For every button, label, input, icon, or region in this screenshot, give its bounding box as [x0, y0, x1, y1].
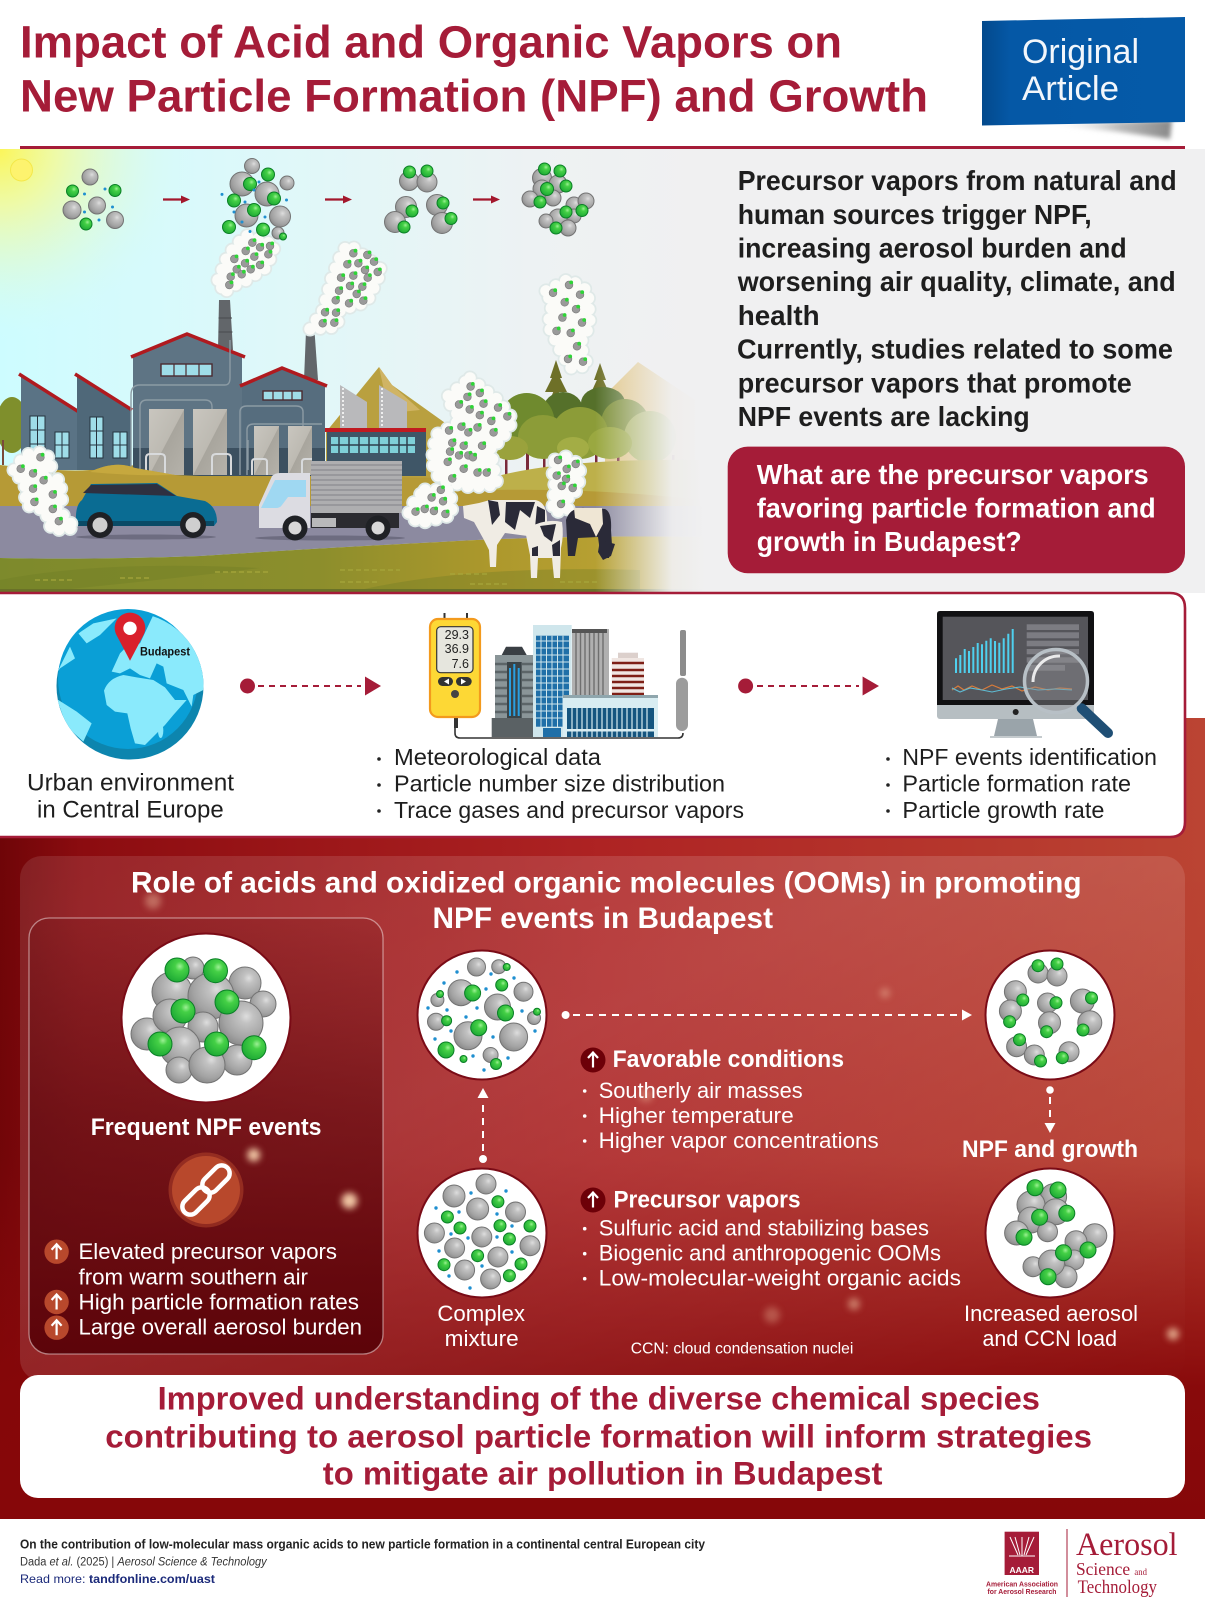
grass	[0, 537, 705, 590]
label: complex mixture	[437, 1301, 526, 1351]
callout: research question: What are the precursor vapors	[757, 459, 1149, 490]
header background	[0, 0, 1205, 149]
text block: favorable conditions: Favorable conditions	[613, 1046, 844, 1073]
text: background statement: health	[738, 300, 820, 331]
cluster: grown particles	[522, 163, 594, 236]
label: NPF and growth: NPF and growth	[962, 1136, 1138, 1163]
icon: chain link	[168, 1152, 244, 1228]
logo: Aerosol Science and Technology	[1076, 1527, 1178, 1598]
label: increased aerosol and CCN load: Increased aerosol	[964, 1301, 1138, 1326]
arrow: clustering to pairs	[562, 1010, 972, 1020]
list: data collected: Trace gases and precursor vapors	[394, 797, 744, 823]
list: data collected: Meteorological data	[394, 744, 601, 770]
title	[20, 16, 928, 122]
truck	[255, 461, 405, 540]
arrow: mixture up to clustering	[478, 1088, 488, 1163]
text: urban environment	[27, 770, 234, 824]
illustration: industrial scene with vapors	[0, 149, 705, 592]
list: elevated outcomes	[44, 1239, 362, 1340]
label: increased aerosol and CCN load	[964, 1301, 1138, 1351]
text block: favorable conditions	[580, 1046, 879, 1153]
arrows: growth sequence	[163, 196, 500, 204]
text block: favorable conditions: Higher temperature	[599, 1103, 794, 1128]
label: complex mixture: mixture	[445, 1326, 519, 1351]
text: background statement: human sources trigger NPF,	[738, 199, 1092, 230]
text: citation: Read more: tandfonline.com/uast	[20, 1572, 215, 1586]
callout: conclusion	[20, 1375, 1185, 1498]
text block: precursor vapors: Precursor vapors	[614, 1187, 800, 1214]
list: data collected	[377, 744, 744, 823]
text block: precursor vapors: Biogenic and anthropogenic OOMs	[599, 1241, 941, 1266]
heading: Role of acids and oxidized organic molecules (OOMs) in promoting	[131, 867, 1082, 900]
list: data collected: Particle number size distribution	[394, 771, 725, 797]
text block: precursor vapors	[580, 1187, 961, 1291]
logo: AAAR	[986, 1532, 1058, 1596]
text: background statement: increasing aerosol burden and	[738, 233, 1127, 264]
title: New Particle Formation (NPF) and Growth	[20, 70, 928, 122]
heading	[131, 867, 1082, 935]
fade to panel	[595, 340, 705, 592]
text: background statement: Precursor vapors from natural and	[738, 165, 1177, 196]
smoke plumes	[14, 235, 590, 530]
icon: clustering mixture circle	[418, 950, 546, 1080]
text: background statement	[737, 165, 1177, 432]
text: background statement: worsening air quality, climate, and	[737, 266, 1176, 297]
label: increased aerosol and CCN load: and CCN load	[982, 1326, 1117, 1351]
icon: grown particles circle	[986, 1168, 1114, 1298]
text: background statement: NPF events are lacking	[738, 401, 1030, 432]
text block: precursor vapors: Sulfuric acid and stabilizing bases	[599, 1216, 929, 1241]
note: CCN definition: CCN: cloud condensation nuclei	[631, 1340, 853, 1357]
label: frequent NPF events: Frequent NPF events	[91, 1114, 322, 1141]
list: analyses: Particle formation rate	[902, 771, 1131, 797]
icon: measuring instruments and city: 29.3	[445, 628, 469, 642]
footer background	[0, 1519, 1205, 1607]
icon: globe with Budapest pin	[56, 609, 205, 760]
red background	[0, 718, 1205, 1519]
cluster: paired molecules	[384, 165, 457, 234]
text: citation	[20, 1537, 705, 1586]
arrow: pairs to growth	[1044, 1086, 1056, 1133]
logo: Aerosol Science and Technology: Technology	[1078, 1577, 1157, 1598]
text block: favorable conditions: Higher vapor concentrations	[599, 1128, 879, 1153]
factory buildings	[19, 334, 426, 476]
icon: monitor with magnifier	[937, 611, 1108, 738]
icon: measuring instruments and city: 7.6	[452, 657, 469, 671]
text block: precursor vapors: Low-molecular-weight organic acids	[599, 1266, 961, 1291]
title: Impact of Acid and Organic Vapors on	[20, 16, 842, 68]
icon: large particle	[122, 934, 290, 1102]
callout: research question: growth in Budapest?	[757, 526, 1022, 557]
callout: conclusion: contributing to aerosol particle formation will inform strategies	[105, 1418, 1092, 1454]
logo: AAAR: for Aerosol Research	[988, 1587, 1057, 1596]
icon: measuring instruments and city: 36.9	[445, 642, 469, 656]
logo: Aerosol Science and Technology: Science and	[1076, 1559, 1147, 1579]
logo: AAAR: AAAR	[1010, 1565, 1034, 1575]
list: analyses: Particle growth rate	[902, 797, 1104, 823]
callout: conclusion: Improved understanding of the diverse chemical species	[158, 1380, 1040, 1416]
callout: research question	[728, 447, 1185, 573]
list: analyses	[886, 744, 1157, 823]
icon: measuring instruments and city	[430, 613, 688, 738]
arrow: globe to instruments	[240, 676, 381, 696]
text: citation: Dada et al. (2025) | Aerosol Science & Technology	[20, 1557, 268, 1569]
list: elevated outcomes: Elevated precursor vapors	[78, 1239, 337, 1264]
car	[76, 483, 217, 540]
badge: original article: Article	[1022, 70, 1119, 108]
logo: AAAR: American Association	[986, 1580, 1058, 1589]
hill	[0, 462, 700, 512]
badge: original article	[982, 17, 1185, 139]
list: analyses: NPF events identification	[902, 744, 1157, 770]
text: urban environment: in Central Europe	[37, 797, 224, 824]
arrow: instruments to analysis	[738, 676, 879, 696]
badge: original article: Original	[1022, 33, 1139, 71]
road	[0, 506, 705, 559]
dirt mound	[0, 465, 300, 512]
cluster: separate vapors	[63, 169, 124, 230]
molecule clusters: growth sequence	[63, 158, 594, 240]
logo divider	[1066, 1529, 1068, 1597]
text: citation: On the contribution of low-molecular mass organic acids to new particle formation in a continental central European city	[20, 1537, 705, 1551]
panel: intro background	[0, 149, 1205, 593]
list: elevated outcomes: High particle formation rates	[78, 1289, 359, 1314]
panel: methods	[0, 593, 1185, 837]
icon: paired molecules circle	[986, 950, 1114, 1080]
panel: role of acids and OOMs	[20, 856, 1185, 1381]
callout: conclusion: to mitigate air pollution in Budapest	[323, 1455, 883, 1491]
label: complex mixture: Complex	[437, 1301, 526, 1326]
text: background statement: Currently, studies related to some	[737, 334, 1173, 365]
chimneys	[218, 300, 318, 380]
cluster: complex mixture	[220, 158, 294, 240]
text: background statement: precursor vapors that promote	[738, 367, 1132, 398]
cows	[463, 500, 615, 578]
mountains	[326, 362, 695, 480]
heading: NPF events in Budapest	[432, 902, 773, 935]
callout: research question: favoring particle formation and	[757, 492, 1156, 523]
logo: Aerosol Science and Technology: Aerosol	[1076, 1527, 1178, 1563]
text block: favorable conditions: Southerly air masses	[599, 1078, 803, 1103]
icon: complex mixture circle	[418, 1168, 546, 1298]
header rule	[20, 146, 1185, 149]
trees	[0, 360, 676, 483]
list: elevated outcomes: from warm southern air	[78, 1264, 308, 1289]
text: urban environment: Urban environment	[27, 770, 234, 797]
icon: globe with Budapest pin: Budapest	[140, 647, 190, 659]
panel: frequent NPF events	[29, 918, 383, 1354]
list: elevated outcomes: Large overall aerosol burden	[78, 1314, 362, 1339]
